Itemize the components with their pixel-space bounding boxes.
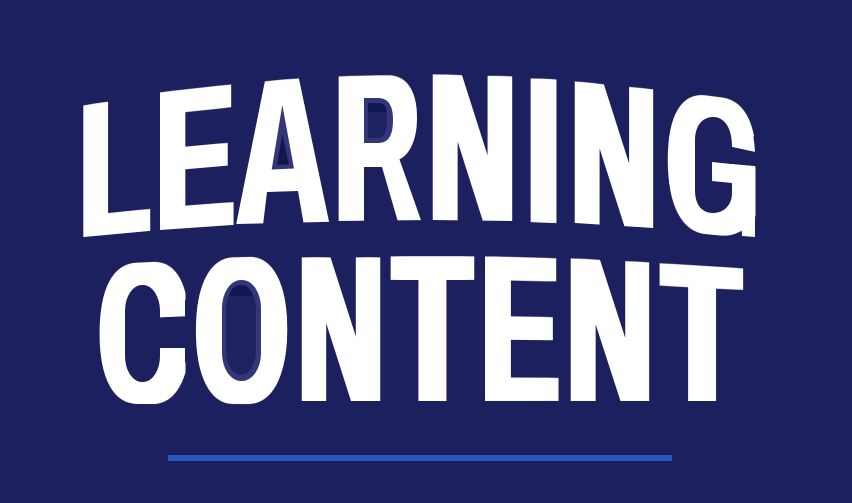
blue underline [168,455,672,461]
title line: CONTENT: E [482,212,558,447]
title line: CONTENT [100,212,744,448]
title line: LEARNING: I [528,34,560,269]
title line: LEARNING [80,29,756,280]
title line: LEARNING: N [572,37,656,272]
title line: CONTENT: N [299,213,383,447]
title line: LEARNING: E [157,41,233,274]
title line: LEARNING: A [240,31,325,269]
title line: CONTENT: C [103,219,183,447]
title line: LEARNING: R [336,30,419,267]
title line: CONTENT: N [568,214,652,447]
title line: LEARNING: L [80,54,149,279]
title line: CONTENT: T [394,212,471,447]
title line: CONTENT: T [663,221,740,445]
title line: CONTENT: O [199,214,284,448]
title line: LEARNING: G [671,51,755,280]
title line: LEARNING: N [430,29,515,267]
